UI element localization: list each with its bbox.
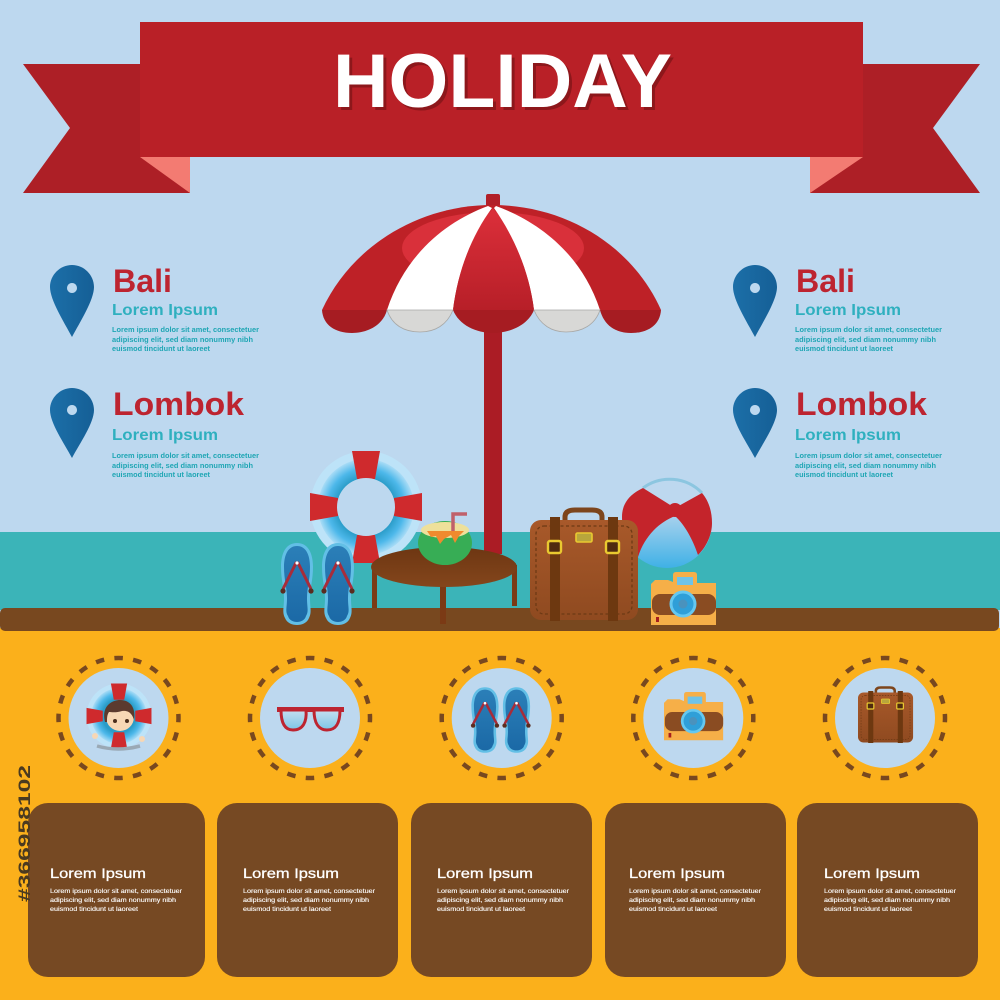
water ripple <box>97 746 140 749</box>
card heading: Lorem Ipsum <box>824 865 920 881</box>
card heading: Lorem Ipsum <box>629 865 725 881</box>
icon badge: boy in life ring <box>58 658 178 778</box>
umbrella scallops <box>322 310 387 333</box>
card body: adipiscing elit, sed diam nonummy nibh <box>50 897 177 904</box>
subheading: Lorem Ipsum <box>795 302 901 319</box>
card body <box>437 888 569 913</box>
umbrella <box>322 194 661 554</box>
card body: euismod tincidunt ut laoreet <box>243 906 331 913</box>
beach ball <box>622 478 712 568</box>
icon badge: camera <box>633 658 753 778</box>
body text Lombok: Lorem ipsum dolor sit amet, consectetuer <box>795 451 942 460</box>
card heading: Lorem Ipsum <box>437 865 533 881</box>
ribbon right tail <box>810 64 980 193</box>
body text Bali <box>795 325 942 353</box>
card body: adipiscing elit, sed diam nonummy nibh <box>824 897 951 904</box>
suitcase <box>530 510 638 621</box>
table <box>371 547 517 624</box>
subheading: Lorem Ipsum <box>112 427 218 444</box>
sea band <box>0 532 1000 610</box>
card body <box>50 888 182 913</box>
card body: adipiscing elit, sed diam nonummy nibh <box>243 897 370 904</box>
ribbon banner <box>23 22 980 193</box>
body text Lombok: Lorem ipsum dolor sit amet, consectetuer <box>112 451 259 460</box>
left info column <box>50 263 259 479</box>
card body: Lorem ipsum dolor sit amet, consectetuer <box>437 888 569 895</box>
body text Bali: Lorem ipsum dolor sit amet, consectetuer <box>112 325 259 334</box>
card body: Lorem ipsum dolor sit amet, consectetuer <box>629 888 761 895</box>
card heading: Lorem Ipsum <box>50 865 146 881</box>
coconut drink <box>418 514 472 565</box>
ball red panels <box>622 488 712 557</box>
subheading: Lorem Ipsum <box>795 427 901 444</box>
ribbon left tail <box>23 64 190 193</box>
body text Lombok <box>795 451 942 479</box>
heading Lombok: Lombok <box>113 386 244 422</box>
body text Lombok <box>112 451 259 479</box>
subheading: Lorem Ipsum <box>112 302 218 319</box>
body text Bali: adipiscing elit, sed diam nonummy nibh <box>112 335 253 344</box>
title: HOLIDAY <box>333 39 672 124</box>
heading Bali: Bali <box>113 263 172 299</box>
hands <box>92 733 98 739</box>
card 4 <box>605 803 786 977</box>
card body <box>243 888 375 913</box>
heading Bali: Bali <box>796 263 855 299</box>
body text Bali: Lorem ipsum dolor sit amet, consectetuer <box>795 325 942 334</box>
coconut flesh <box>421 522 469 538</box>
flip flops <box>280 543 355 625</box>
card heading: Lorem Ipsum <box>243 865 339 881</box>
boy head <box>104 700 134 731</box>
pin icon Bali <box>733 265 777 337</box>
umbrella white left panel <box>387 206 492 310</box>
card 1 <box>28 803 205 977</box>
icon badge: flip flops <box>442 658 562 778</box>
body text Bali: adipiscing elit, sed diam nonummy nibh <box>795 335 936 344</box>
body text Bali: euismod tincidunt ut laoreet <box>112 344 210 353</box>
straw <box>453 514 467 531</box>
ribbon right fold <box>810 157 863 193</box>
ribbon main band <box>140 22 863 157</box>
card body: euismod tincidunt ut laoreet <box>824 906 912 913</box>
card body <box>629 888 761 913</box>
umbrella white right panel <box>494 206 600 310</box>
title shadow: HOLIDAY <box>336 42 675 127</box>
camera <box>651 572 716 625</box>
body text Lombok: euismod tincidunt ut laoreet <box>112 470 210 479</box>
card 3 <box>411 803 592 977</box>
right info column <box>733 263 942 479</box>
umbrella dome <box>322 205 661 310</box>
life ring <box>310 451 422 563</box>
card body: Lorem ipsum dolor sit amet, consectetuer <box>50 888 182 895</box>
card body: euismod tincidunt ut laoreet <box>629 906 717 913</box>
umbrella centre panel <box>453 208 534 310</box>
body text Lombok: adipiscing elit, sed diam nonummy nibh <box>795 461 936 470</box>
body text Bali <box>112 325 259 353</box>
icon badge: suitcase <box>825 658 945 778</box>
ribbon left fold <box>140 157 190 193</box>
body text Lombok: adipiscing elit, sed diam nonummy nibh <box>112 461 253 470</box>
heading Lombok: Lombok <box>796 386 927 422</box>
card body: euismod tincidunt ut laoreet <box>437 906 525 913</box>
pin icon Bali <box>50 265 94 337</box>
umbrella finial <box>486 194 500 207</box>
coconut shell <box>418 521 472 565</box>
card body: adipiscing elit, sed diam nonummy nibh <box>437 897 564 904</box>
card body: Lorem ipsum dolor sit amet, consectetuer <box>243 888 375 895</box>
card body: euismod tincidunt ut laoreet <box>50 906 138 913</box>
life ring <box>87 684 151 748</box>
card body <box>824 888 956 913</box>
body text Lombok: euismod tincidunt ut laoreet <box>795 470 893 479</box>
card body: adipiscing elit, sed diam nonummy nibh <box>629 897 756 904</box>
icon badge: sunglasses <box>250 658 370 778</box>
card 5 <box>797 803 978 977</box>
umbrella pole <box>484 330 502 554</box>
ground strip <box>0 608 999 631</box>
pin icon Lombok <box>50 388 94 458</box>
sand panel <box>0 628 1000 1000</box>
pin icon Lombok <box>733 388 777 458</box>
card body: Lorem ipsum dolor sit amet, consectetuer <box>824 888 956 895</box>
body text Bali: euismod tincidunt ut laoreet <box>795 344 893 353</box>
card 2 <box>217 803 398 977</box>
sunglasses <box>277 707 344 730</box>
image id: #366958102 <box>15 765 34 902</box>
